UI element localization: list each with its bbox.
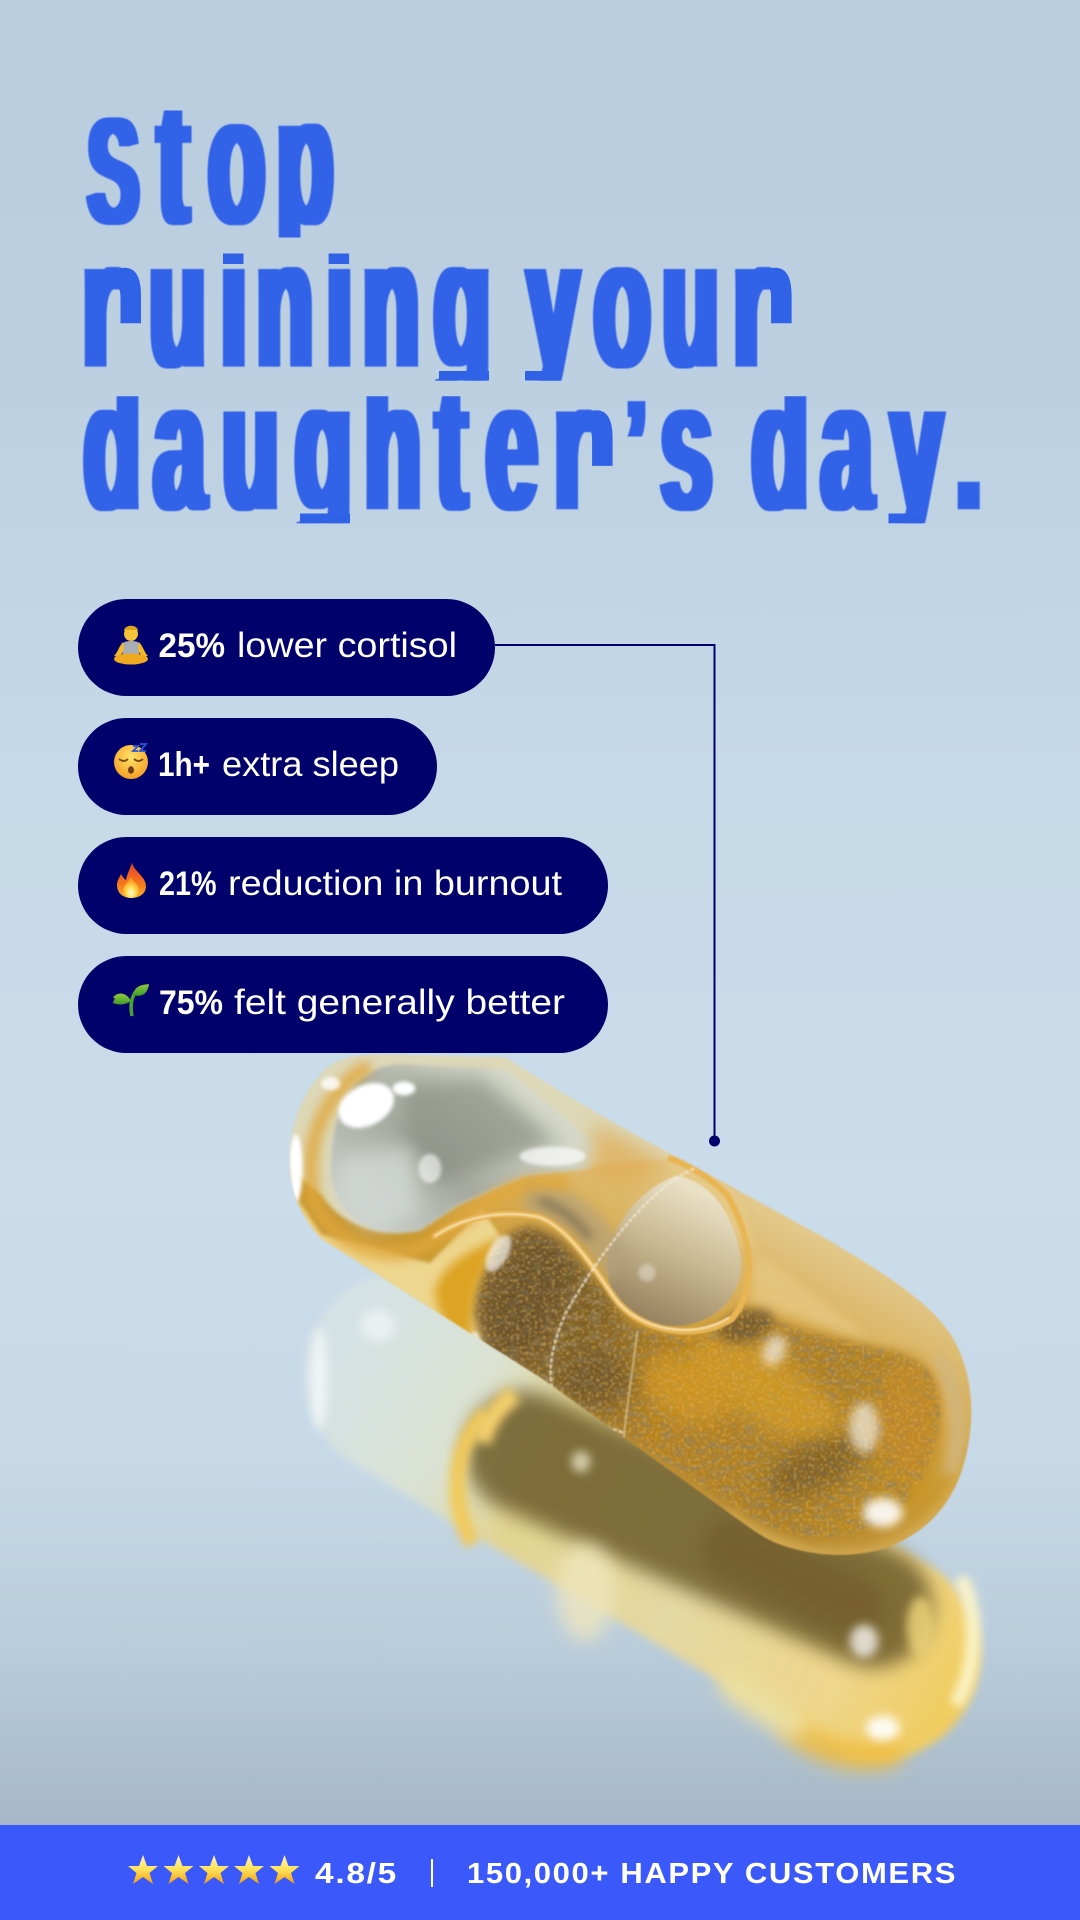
connector line from first pill to capsule xyxy=(495,645,720,1146)
capsule body xyxy=(288,1054,972,1556)
clear upper end xyxy=(288,1054,674,1234)
stat pill: sleep: extra sleep xyxy=(222,745,399,784)
headline line 1: top xyxy=(158,57,333,263)
capsule photo illustration xyxy=(260,1040,1000,1756)
bottom rating bar xyxy=(0,1825,1080,1920)
upper amber band xyxy=(661,1151,863,1337)
icon: fire xyxy=(117,863,146,898)
headline line 2: ruining your xyxy=(83,200,770,406)
stat text: 75% xyxy=(159,984,223,1022)
stat pill: burnout: reduction in burnout xyxy=(228,864,562,903)
icon: meditating person xyxy=(114,626,148,664)
stat pill: cortisol xyxy=(78,599,495,696)
headline letter dots, feet and r hooks xyxy=(104,254,922,523)
stat pill: wellbeing xyxy=(78,956,608,1053)
capsule reflection xyxy=(310,1310,973,1756)
headline xyxy=(82,110,980,524)
icon: seedling xyxy=(113,984,149,1016)
icon: five stars xyxy=(128,1855,300,1884)
stat text: 1h+ xyxy=(158,746,210,784)
headline line 1 xyxy=(85,110,335,238)
stat text: 25% xyxy=(158,627,225,665)
powder fill xyxy=(470,1221,945,1540)
headline line 3: ’ xyxy=(628,375,645,514)
stat pill: wellbeing: felt generally better xyxy=(234,983,565,1022)
stat text: 21% xyxy=(159,865,216,903)
yellow clear lower shell xyxy=(297,1198,502,1342)
stat pill: cortisol: lower cortisol xyxy=(237,626,457,665)
lower and right rims xyxy=(732,1472,960,1555)
headline line 1: S xyxy=(88,87,139,256)
rating value: 4.8/5 xyxy=(315,1858,398,1890)
stat pill: sleep xyxy=(78,718,437,815)
divider xyxy=(431,1859,433,1887)
customer count: 150,000+ HAPPY CUSTOMERS xyxy=(467,1858,957,1890)
specular highlights xyxy=(289,1074,903,1527)
icon: sleeping face xyxy=(114,744,148,779)
headline line 3: s day. xyxy=(661,342,982,549)
headline line 3: daughter xyxy=(84,342,590,549)
capsule seam xyxy=(551,1168,694,1433)
stat pill: burnout xyxy=(78,837,608,934)
clear bulge xyxy=(607,1176,741,1326)
headline line 3 xyxy=(82,396,980,524)
flowing amber ribbon xyxy=(311,1069,562,1253)
amber shoulder by the powder xyxy=(435,1239,501,1345)
